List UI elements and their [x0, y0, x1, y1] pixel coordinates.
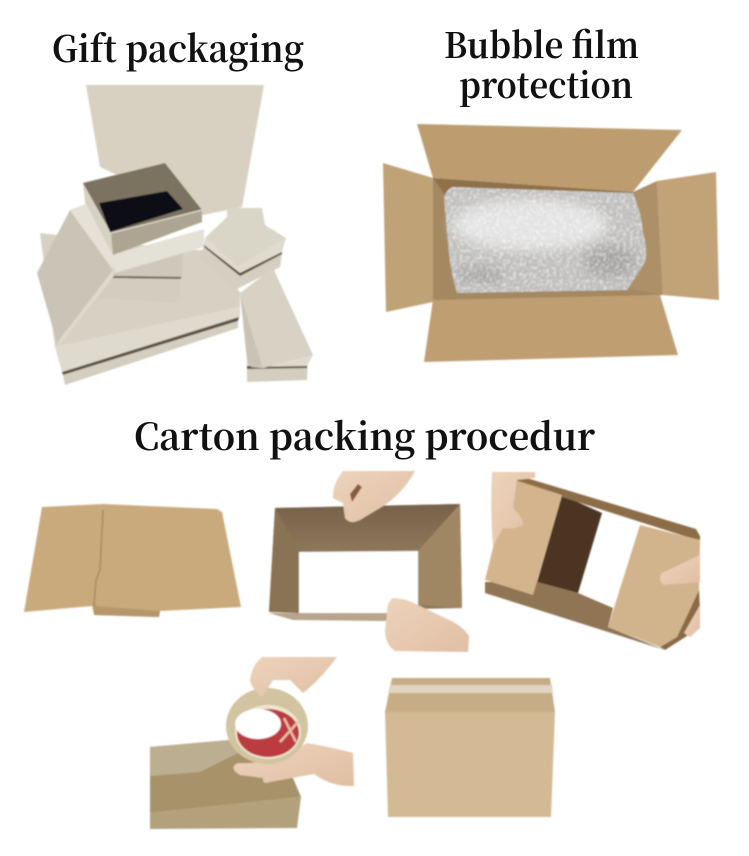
title: Bubble film protection	[444, 19, 639, 109]
bottom flap	[424, 295, 678, 362]
small square box	[198, 208, 286, 290]
back dark panel	[537, 495, 602, 593]
opening	[299, 551, 418, 613]
stacked box behind	[98, 253, 183, 303]
step 1: flat carton	[24, 504, 241, 617]
large flat box	[40, 233, 240, 385]
top flap	[417, 124, 682, 192]
left hand	[491, 472, 535, 547]
carton	[150, 740, 301, 813]
bubble film	[444, 187, 646, 293]
upper hand	[250, 657, 337, 697]
right flap	[608, 525, 700, 647]
title: Bubble film protection: Bubble film	[444, 19, 639, 69]
right flap	[657, 172, 719, 300]
right hand	[660, 555, 700, 585]
title: Gift packaging: Gift packaging	[52, 22, 304, 73]
photo: cardboard box with bubble film	[383, 124, 719, 362]
left flap	[485, 480, 562, 595]
left flap	[383, 163, 433, 312]
step 4: taping carton	[150, 657, 354, 829]
heading: Carton packing procedur: Carton packing procedur	[134, 407, 595, 461]
open box with black insert	[83, 163, 204, 273]
bottom panel	[485, 582, 665, 650]
step 5: sealed carton	[385, 678, 555, 817]
lower hand	[385, 598, 469, 652]
lower hand	[233, 743, 354, 786]
inner walls	[433, 178, 663, 302]
step 2: opened carton held by hands	[269, 471, 469, 652]
top rim	[510, 473, 700, 541]
step 3: carton tilted with flaps	[485, 472, 700, 650]
photo: gift boxes	[37, 85, 313, 385]
tilted lid	[37, 204, 114, 344]
title: Bubble film protection: protection	[459, 59, 633, 109]
backboard bag	[86, 85, 264, 215]
right inner wall	[627, 181, 663, 295]
tape roll	[226, 688, 308, 764]
upper hand	[333, 471, 415, 522]
long box	[240, 268, 313, 382]
